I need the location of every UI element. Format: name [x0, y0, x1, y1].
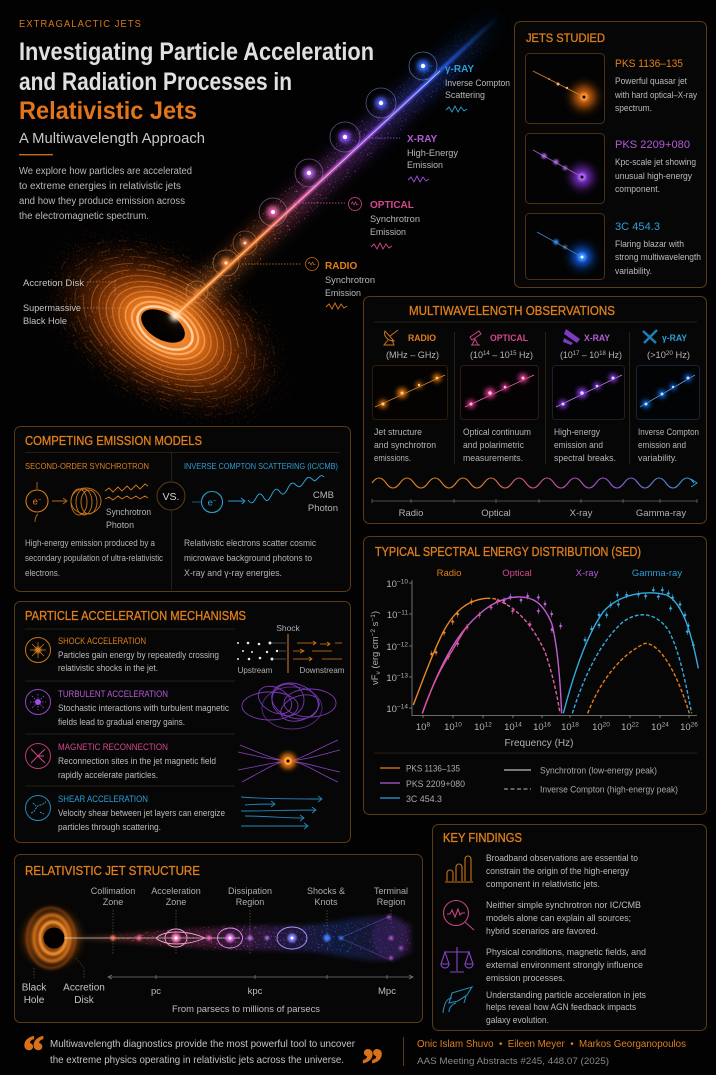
jet card: PKS 2209+080: Kpc-scale jet showing: [615, 157, 696, 167]
zone labels: Terminal: [374, 886, 408, 896]
right model: inverse Compton: −: [213, 498, 217, 504]
column: optical: measurements.: [463, 453, 523, 464]
column: x-ray: 17: [573, 350, 580, 357]
jet knots: [186, 52, 437, 303]
finding 1: Broadband observations are essential to: [486, 853, 638, 864]
heading: TYPICAL SPECTRAL ENERGY DISTRIBUTION (SED): [375, 545, 641, 559]
finding 4: helps reveal how AGN feedback impacts: [486, 1002, 636, 1013]
SED chart: ν: [375, 671, 382, 674]
jet glow: [175, 15, 500, 316]
column: x-ray: High-energy: [554, 427, 600, 438]
accretion disk: [0, 175, 340, 481]
jet structure beam: [64, 915, 412, 961]
SED legend: PKS 1136–135: [406, 764, 460, 774]
zone labels: Knots: [314, 897, 338, 907]
column: radio: (MHz – GHz): [386, 350, 439, 361]
SED chart: 16: [544, 722, 551, 728]
column: optical: and polarimetric: [463, 440, 524, 451]
left model: second-order synchrotron: Synchrotron: [106, 507, 151, 518]
SED chart: 10: [533, 722, 544, 733]
intro text: and how they produce emission across: [19, 196, 185, 207]
label: x-ray: [366, 134, 458, 182]
label: supermassive black hole: Supermassive: [23, 303, 81, 314]
SED chart: 24: [662, 722, 669, 728]
scale axis: Mpc: [378, 986, 396, 997]
finding 3: emission processes.: [486, 973, 565, 984]
scale axis: From parsecs to millions of parsecs: [172, 1004, 320, 1015]
column: optical: Hz): [517, 350, 533, 361]
opening quote mark: “: [23, 1029, 44, 1075]
column: x-ray: (10: [560, 350, 574, 361]
jet card: 3C 454.3: variability.: [615, 266, 652, 276]
column: radio: Jet structure: [374, 427, 422, 438]
column: gamma-ray: Hz): [673, 350, 690, 361]
scale axis: kpc: [248, 986, 263, 997]
label: gamma-ray: γ-RAY: [445, 64, 474, 75]
left model: second-order synchrotron: Photon: [106, 520, 134, 531]
spectrum axis: Gamma-ray: [636, 508, 686, 519]
diagram: shock: [237, 623, 345, 675]
SED chart: Frequency (Hz): [505, 738, 573, 749]
column: x-ray: – 10: [579, 350, 599, 361]
panel: relativistic jet structure: [14, 854, 422, 1022]
SED chart: 18: [572, 722, 579, 728]
mechanism: shear: particles through scattering.: [58, 822, 161, 833]
scale axis: [108, 975, 413, 1015]
finding 1: [445, 853, 638, 890]
jet card: 3C 454.3: strong multiwavelength: [615, 252, 701, 262]
label: radio: [242, 258, 375, 309]
mechanism: turbulent: TURBULENT ACCELERATION: [58, 689, 168, 699]
mechanism: shock: SHOCK ACCELERATION: [58, 636, 146, 646]
label: x-ray: High-Energy: [407, 148, 458, 159]
black hole and disk labels: [22, 958, 105, 1006]
column: gamma-ray: Inverse Compton: [638, 427, 699, 438]
band labels: Optical: [502, 568, 532, 579]
quote: the extreme physics operating in relativistic jets across the universe.: [50, 1054, 344, 1066]
left model: second-order synchrotron: SECOND-ORDER SYNCHROTRON: [25, 461, 149, 471]
right model: inverse Compton: e: [208, 498, 213, 508]
zone labels: Shocks &: [307, 886, 345, 896]
finding 3: [441, 947, 646, 984]
jet card: 3C 454.3: [526, 214, 701, 280]
SED chart: 10: [651, 722, 662, 733]
label: accretion disk: [23, 278, 115, 295]
diagram: turbulence: [242, 677, 336, 729]
band labels: [437, 568, 682, 579]
quote: Multiwavelength diagnostics provide the most powerful tool to uncover: [50, 1038, 355, 1050]
spectrum axis: [372, 499, 697, 519]
column: optical: (10: [470, 350, 484, 361]
right model: inverse Compton: CMB: [313, 490, 334, 501]
panel: competing emission models: [14, 426, 350, 592]
SED legend: [374, 753, 697, 805]
band labels: Radio: [437, 568, 461, 579]
column: optical: OPTICAL: [490, 333, 528, 344]
jet card: PKS 2209+080: component.: [615, 184, 660, 194]
SED chart: 8: [426, 722, 430, 728]
jet base flare: [170, 311, 180, 321]
mechanism: turbulent: Stochastic interactions with turbulent magnetic: [58, 703, 229, 714]
SED chart: 10: [386, 704, 397, 715]
heading: PARTICLE ACCELERATION MECHANISMS: [25, 609, 246, 623]
finding 1: component in relativistic jets.: [486, 879, 600, 890]
jet core beam: [175, 71, 440, 316]
heading: KEY FINDINGS: [443, 831, 522, 845]
band labels: Gamma-ray: [632, 568, 682, 579]
right model: inverse Compton: X-ray and γ-ray energies.: [184, 568, 282, 579]
SED chart: −12: [397, 642, 408, 648]
jet glowing beam: [175, 15, 500, 316]
column: gamma-ray: 20: [666, 350, 673, 357]
title: and Radiation Processes in: [19, 68, 292, 96]
SED chart: 14: [515, 722, 522, 728]
right model: inverse Compton: [184, 461, 338, 579]
finding 2: Neither simple synchrotron nor IC/CMB: [486, 900, 641, 911]
SED chart: 10: [386, 642, 397, 653]
title: Relativistic Jets: [19, 97, 197, 125]
SED chart: 10: [386, 673, 397, 684]
label: gamma-ray: Inverse Compton: [445, 78, 510, 89]
SED chart: 20: [603, 722, 610, 728]
quote: [23, 1029, 383, 1075]
jet card: PKS 1136-135: spectrum.: [615, 103, 652, 113]
panel: jets studied: [514, 22, 706, 288]
left model: second-order synchrotron: secondary population of ultra-relativistic: [25, 553, 163, 564]
zone labels: Region: [377, 897, 405, 907]
left model: second-order synchrotron: e: [33, 496, 38, 508]
finding 4: Understanding particle acceleration in jets: [486, 990, 646, 1001]
zone labels: [91, 886, 408, 907]
column: gamma-ray: emission and: [638, 440, 686, 451]
title: Investigating Particle Acceleration: [19, 38, 374, 66]
authors and citation: [404, 1037, 686, 1067]
black hole diagram: [26, 908, 78, 968]
panel: SED: [364, 536, 706, 814]
mechanism: shear: [26, 794, 225, 833]
black hole and disk labels: Accretion: [63, 982, 105, 994]
zone labels: Collimation: [91, 886, 135, 896]
intro text: We explore how particles are accelerated: [19, 166, 192, 177]
SED chart: 10: [474, 722, 485, 733]
intro text: [19, 154, 192, 222]
SED chart: s: [370, 621, 381, 629]
SED chart: νF: [370, 674, 381, 685]
label: optical: [293, 198, 420, 249]
diagram: reconnection: [238, 740, 340, 782]
SED chart: 10: [455, 722, 462, 728]
SED chart: ): [370, 611, 381, 614]
zone labels: Zone: [103, 897, 123, 907]
SED chart: 10: [444, 722, 455, 733]
spectrum axis: Optical: [481, 508, 511, 519]
column: x-ray: 18: [599, 350, 606, 357]
jet card: PKS 1136-135: [526, 54, 697, 124]
jet particle halo: [175, 15, 500, 316]
column: radio: [372, 330, 448, 464]
mechanism: turbulent: [26, 689, 229, 728]
column: gamma-ray: variability.: [638, 453, 677, 464]
SED chart: −1: [370, 614, 377, 622]
SED chart: −11: [397, 610, 408, 616]
finding 3: Physical conditions, magnetic fields, and: [486, 947, 646, 958]
VS badge: VS.: [163, 491, 179, 503]
left model: second-order synchrotron: electrons.: [25, 568, 60, 579]
SED chart: −10: [397, 578, 408, 586]
black hole and disk labels: Disk: [74, 995, 95, 1006]
spectrum axis: X-ray: [570, 508, 593, 519]
zone labels: Zone: [166, 897, 186, 907]
label: gamma-ray: [445, 64, 510, 112]
jet card: PKS 2209+080: PKS 2209+080: [615, 139, 690, 151]
authors and citation: AAS Meeting Abstracts #245, 448.07 (2025): [417, 1056, 609, 1067]
panel: particle acceleration mechanisms: [14, 602, 350, 842]
left model: second-order synchrotron: [25, 461, 163, 579]
mechanism: shock: [26, 636, 219, 674]
column: x-ray: X-RAY: [584, 333, 611, 344]
column: gamma-ray: γ-RAY: [662, 333, 688, 344]
subtitle: A Multiwavelength Approach: [19, 131, 205, 147]
heading: JETS STUDIED: [526, 33, 605, 45]
mechanism: reconnection: MAGNETIC RECONNECTION: [58, 742, 168, 752]
column: optical: Optical continuum: [463, 427, 531, 438]
SED chart: 10: [680, 722, 691, 733]
label: radio: Emission: [325, 288, 361, 299]
column: x-ray: spectral breaks.: [554, 453, 616, 464]
mechanism: shear: SHEAR ACCELERATION: [58, 794, 148, 804]
SED chart: 10: [504, 722, 515, 733]
black hole and disk labels: Black: [22, 982, 47, 994]
SED chart: 10: [592, 722, 603, 733]
SED chart: 12: [485, 722, 492, 728]
left model: second-order synchrotron: −: [38, 498, 42, 504]
mechanism: reconnection: Reconnection sites in the jet magnetic field: [58, 756, 216, 767]
column: gamma-ray: [636, 330, 700, 464]
label: x-ray: X-RAY: [407, 134, 438, 145]
SED chart: [370, 578, 698, 749]
label: x-ray: Emission: [407, 160, 443, 171]
SED legend: PKS 2209+080: [406, 779, 465, 790]
right model: inverse Compton: Photon: [308, 503, 338, 514]
scale axis: pc: [151, 986, 161, 997]
SED legend: Inverse Compton (high-energy peak): [540, 784, 678, 796]
jet card: PKS 2209+080: [526, 134, 696, 204]
zone labels: Acceleration: [151, 886, 201, 896]
finding 3: external environment strongly influence: [486, 960, 643, 971]
spectrum axis: Radio: [399, 508, 423, 519]
SED chart: 10: [387, 610, 397, 621]
spectrum wave arrow: [372, 478, 697, 488]
SED chart: 22: [632, 722, 639, 728]
SED chart: (erg cm: [370, 636, 381, 671]
mechanism: reconnection: rapidly accelerate particles.: [58, 770, 158, 781]
finding 1: constrain the origin of the high-energy: [486, 866, 629, 877]
column: gamma-ray: (>10: [647, 350, 666, 361]
black hole and disk labels: Hole: [24, 995, 45, 1006]
SED chart: 10: [621, 722, 632, 733]
heading: COMPETING EMISSION MODELS: [25, 434, 202, 448]
heading: MULTIWAVELENGTH OBSERVATIONS: [409, 303, 615, 318]
black hole: [135, 302, 191, 350]
label: supermassive black hole: Black Hole: [23, 316, 67, 327]
finding 4: [443, 987, 646, 1026]
label: optical: OPTICAL: [370, 200, 414, 211]
column: optical: 14: [483, 350, 490, 357]
right model: inverse Compton: INVERSE COMPTON SCATTERING (IC/CMB): [184, 461, 338, 471]
SED chart: 26: [691, 722, 698, 728]
column: radio: RADIO: [408, 333, 436, 344]
finding 4: galaxy evolution.: [486, 1015, 549, 1026]
SED chart: −2: [370, 629, 377, 636]
mechanism: turbulent: fields lead to gradual energy gains.: [58, 717, 185, 728]
label: optical: Emission: [370, 227, 406, 238]
column: radio: emissions.: [374, 453, 411, 464]
zone labels: Dissipation: [228, 886, 272, 896]
jet card: 3C 454.3: 3C 454.3: [615, 221, 660, 233]
column: optical: [460, 331, 538, 464]
column: x-ray: emission and: [554, 440, 603, 451]
SED legend: 3C 454.3: [406, 794, 442, 805]
SED chart: −14: [397, 704, 408, 710]
right model: inverse Compton: microwave background photons to: [184, 553, 312, 564]
VS badge: [157, 482, 185, 510]
hero illustration: accretion disk and jet: [0, 15, 500, 481]
label: optical: Synchrotron: [370, 214, 420, 225]
zone labels: Region: [236, 897, 264, 907]
SED chart: 10: [386, 579, 397, 590]
column: radio: and synchrotron: [374, 440, 436, 451]
column: x-ray: Hz): [606, 350, 622, 361]
jet card: PKS 1136-135: with hard optical–X-ray: [614, 90, 697, 100]
panel: multiwavelength observations: [364, 296, 706, 524]
finding 2: models alone can explain all sources;: [486, 913, 631, 924]
label: radio: Synchrotron: [325, 275, 375, 286]
panel: key findings: [432, 824, 706, 1030]
column: optical: 15: [510, 350, 517, 357]
authors and citation: Onic Islam Shuvo • Eileen Meyer • Markos Georganopoulos: [417, 1039, 686, 1050]
left model: second-order synchrotron: High-energy emission produced by a: [25, 538, 156, 549]
SED chart: 10: [561, 722, 572, 733]
SED chart: 10: [416, 722, 426, 733]
jet card: 3C 454.3: Flaring blazar with: [615, 239, 684, 249]
SED chart: −13: [397, 672, 408, 680]
label: radio: RADIO: [325, 261, 357, 272]
jet card: PKS 1136-135: Powerful quasar jet: [615, 76, 687, 86]
SED legend: Synchrotron (low-energy peak): [540, 766, 657, 776]
mechanism: shock: relativistic shocks in the jet.: [58, 663, 158, 674]
column: optical: – 10: [490, 350, 510, 361]
title: [19, 38, 374, 125]
jet card: PKS 2209+080: unusual high-energy: [615, 171, 692, 181]
label: accretion disk: Accretion Disk: [23, 278, 84, 289]
diagram: shear: [241, 796, 322, 829]
mechanism: reconnection: [26, 742, 216, 781]
label: gamma-ray: Scattering: [445, 90, 485, 101]
label: supermassive black hole: [23, 303, 125, 327]
diagram: shock: Shock: [276, 623, 301, 633]
finding 2: [444, 900, 641, 937]
mechanism: shock: Particles gain energy by repeatedly crossing: [58, 650, 219, 661]
diagram: shock: Downstream: [300, 666, 345, 675]
band labels: X-ray: [576, 568, 599, 579]
heading: RELATIVISTIC JET STRUCTURE: [25, 864, 200, 878]
right model: inverse Compton: Relativistic electrons scatter cosmic: [184, 538, 316, 549]
jet card: PKS 1136-135: PKS 1136–135: [615, 58, 683, 70]
intro text: the electromagnetic spectrum.: [19, 211, 149, 222]
mechanism: shear: Velocity shear between jet layers can energize: [58, 808, 225, 819]
finding 2: hybrid scenarios are favored.: [486, 926, 598, 937]
diagram: shock: Upstream: [238, 666, 273, 675]
intro text: to extreme energies in relativistic jets: [19, 181, 181, 192]
column: x-ray: [552, 329, 624, 464]
eyebrow: EXTRAGALACTIC JETS: [19, 19, 142, 30]
